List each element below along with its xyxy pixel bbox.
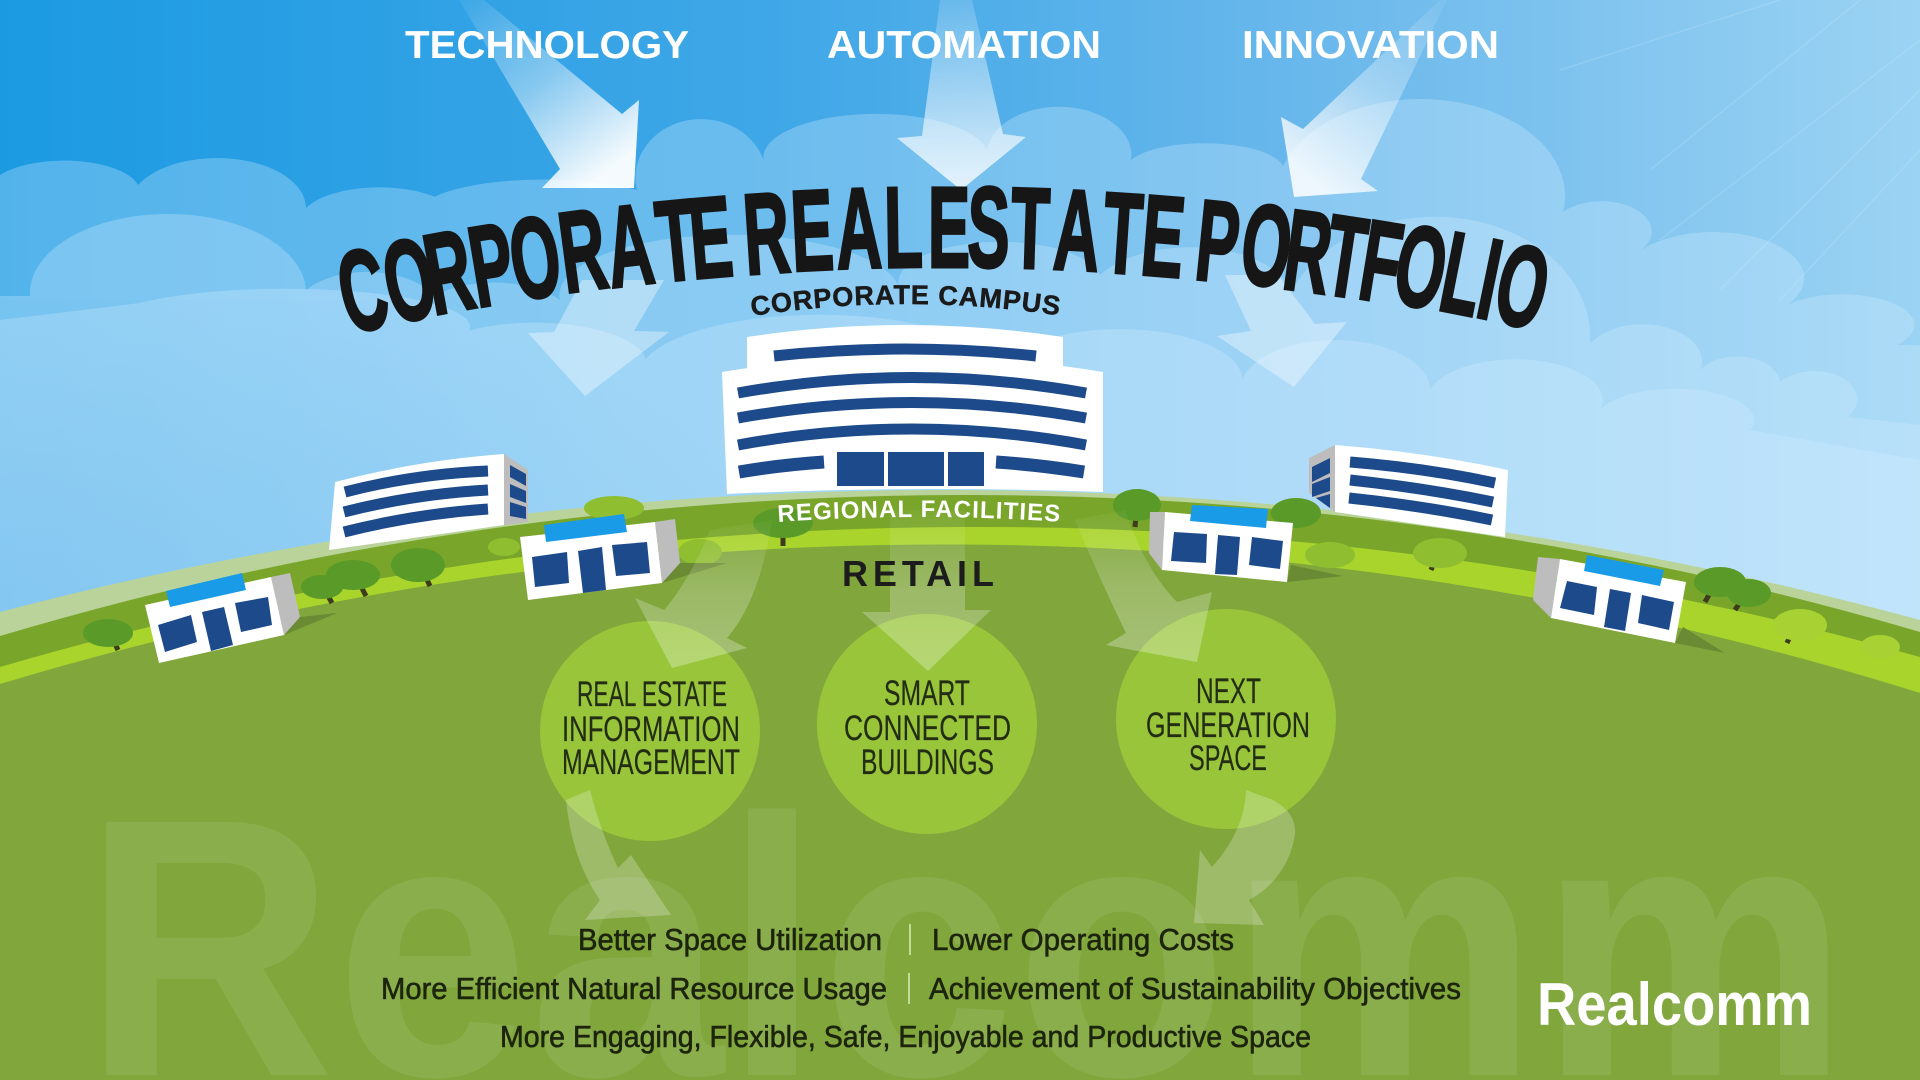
arrow: retail to center circle <box>862 510 991 671</box>
text: next generation space <box>1146 672 1310 778</box>
title: corporate real estate portfolio: O <box>1485 218 1560 354</box>
arrow: retail to left circle <box>635 520 772 668</box>
text: smart connected buildings: BUILDINGS <box>861 743 994 782</box>
label: retail: RETAIL <box>842 553 994 594</box>
title: corporate real estate portfolio: C <box>327 222 399 358</box>
title: corporate real estate portfolio: O <box>1235 179 1299 313</box>
title: corporate real estate portfolio: S <box>966 163 1011 292</box>
title: corporate real estate portfolio: E <box>928 163 970 292</box>
title: corporate real estate portfolio: R <box>1277 185 1340 319</box>
focus circle: smart connected buildings <box>817 614 1037 834</box>
heading: automation: AUTOMATION <box>827 24 1101 67</box>
text: smart connected buildings: CONNECTED <box>844 709 1011 748</box>
title: corporate real estate portfolio: A <box>834 163 884 293</box>
title: corporate real estate portfolio: O <box>372 212 446 348</box>
text: next generation space: GENERATION <box>1146 706 1310 745</box>
title: corporate real estate portfolio: L <box>883 163 924 292</box>
text: real estate information management: MANAGEMENT <box>562 743 740 782</box>
benefits list: Lower Operating Costs <box>932 922 1234 957</box>
logo: Realcomm: Realcomm <box>1537 971 1812 1038</box>
title: corporate real estate portfolio: F <box>1352 195 1411 329</box>
title: corporate real estate portfolio: T <box>1009 163 1052 293</box>
clouds <box>0 99 1920 650</box>
benefits list: More Engaging, Flexible, Safe, Enjoyable and Productive Space <box>500 1019 1311 1054</box>
benefits list <box>381 922 1461 1054</box>
arrow: technology, upper <box>459 0 639 188</box>
title: corporate real estate portfolio: E <box>788 165 836 296</box>
text: real estate information management <box>562 675 740 782</box>
building: retail shop, inner right <box>1149 505 1343 582</box>
ground: curved globe layers <box>0 490 1920 1080</box>
title: corporate real estate portfolio: R <box>552 184 614 318</box>
sky background <box>0 0 1920 720</box>
benefits list: More Efficient Natural Resource Usage <box>381 971 887 1006</box>
arrow: innovation, upper <box>1281 0 1447 197</box>
text: next generation space: NEXT <box>1196 672 1261 711</box>
arrow: innovation, lower <box>1217 275 1347 387</box>
heading: technology: TECHNOLOGY <box>405 24 689 67</box>
title: corporate real estate portfolio <box>327 163 1560 358</box>
benefits list: Better Space Utilization <box>578 922 882 957</box>
heading: innovation: INNOVATION <box>1242 24 1499 67</box>
building: left office <box>329 454 528 550</box>
label: corporate campus: CORPORATE CAMPUS <box>751 285 1060 316</box>
trees and bushes <box>83 489 1900 659</box>
focus circle: real estate information management <box>540 621 760 841</box>
building: corporate campus headquarters <box>722 325 1103 494</box>
title: corporate real estate portfolio: T <box>1317 190 1375 323</box>
sun rays, top right <box>1560 0 1920 300</box>
building: right office <box>1309 445 1508 537</box>
title: corporate real estate portfolio: O <box>1385 199 1457 335</box>
focus circle: next generation space <box>1116 609 1336 829</box>
title: corporate real estate portfolio: I <box>1468 214 1512 344</box>
label: regional facilities: REGIONAL FACILITIES <box>778 500 1060 522</box>
building: retail shop, far left <box>145 573 337 663</box>
title: corporate real estate portfolio: T <box>1099 168 1146 299</box>
arrow: left circle to benefits <box>566 790 671 920</box>
text: smart connected buildings <box>844 674 1011 782</box>
building: retail shop, far right <box>1533 555 1725 653</box>
arrow: retail to right circle <box>1075 510 1212 662</box>
title: corporate real estate portfolio: A <box>1051 165 1103 296</box>
benefits list: Achievement of Sustainability Objectives <box>929 971 1461 1006</box>
title: corporate real estate portfolio: E <box>684 172 737 303</box>
building: retail shop, inner left <box>520 514 727 600</box>
title: corporate real estate portfolio: L <box>1431 207 1494 341</box>
title: corporate real estate portfolio: T <box>651 175 702 307</box>
title: corporate real estate portfolio: A <box>599 179 660 312</box>
title: corporate real estate portfolio: O <box>501 190 569 325</box>
text: real estate information management: INFORMATION <box>562 710 740 749</box>
arrow: automation, upper <box>897 0 1026 190</box>
text: next generation space: SPACE <box>1189 739 1267 778</box>
text: real estate information management: REAL ESTATE <box>577 675 727 714</box>
arrow: right circle to benefits <box>1194 790 1295 925</box>
title: corporate real estate portfolio: P <box>1191 175 1246 308</box>
text: smart connected buildings: SMART <box>884 674 970 713</box>
arrow: technology, lower <box>528 280 669 396</box>
title: corporate real estate portfolio: E <box>1137 171 1189 302</box>
title: corporate real estate portfolio: R <box>739 168 793 299</box>
title: corporate real estate portfolio: P <box>460 198 523 332</box>
title: corporate real estate portfolio: R <box>415 204 483 339</box>
